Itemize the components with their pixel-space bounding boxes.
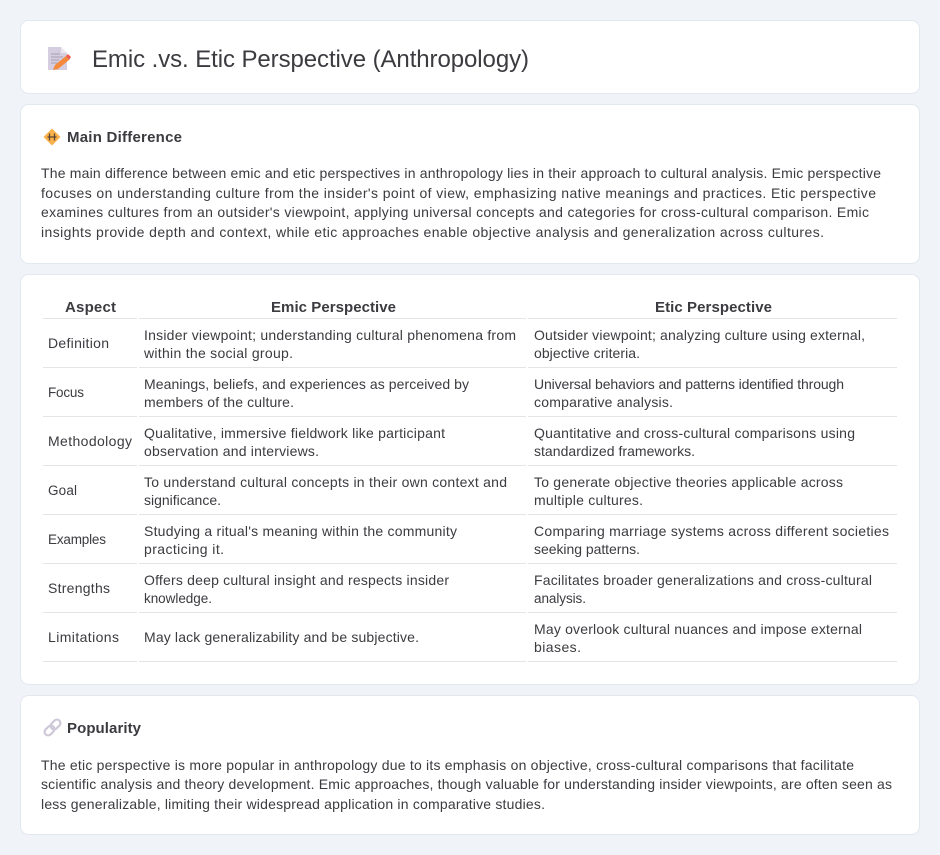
row: definition: Definition <box>48 335 109 351</box>
row: focus: Meanings, beliefs, and experiences as perceived by <box>144 376 469 392</box>
row: limitations <box>48 621 862 655</box>
row: goal: significance. <box>144 492 221 508</box>
row: methodology: Methodology <box>48 433 132 449</box>
text block: main difference paragraph: examines cultures from an outsider's viewpoint, applying universal concepts and categories for cross-cultural comparison. Emic <box>41 204 869 220</box>
row: examples: Comparing marriage systems across different societies <box>534 523 889 539</box>
title: Emic .vs. Etic Perspective (Anthropology) <box>92 46 529 73</box>
row: strengths: Offers deep cultural insight and respects insider <box>144 572 449 588</box>
row: focus <box>48 376 844 410</box>
row: focus: Universal behaviors and patterns identified through <box>534 376 844 392</box>
text block: popularity paragraph <box>41 757 892 812</box>
panel: popularity <box>20 696 920 834</box>
icon: chain link <box>43 718 62 737</box>
table header: Etic Perspective <box>655 299 772 316</box>
row: definition <box>48 327 865 361</box>
row: examples: Studying a ritual's meaning within the community <box>144 523 457 539</box>
heading: popularity: Popularity <box>67 720 142 737</box>
panel: title header <box>20 20 920 94</box>
row: strengths: analysis. <box>534 591 586 606</box>
text block: popularity paragraph: scientific analysis and theory development. Emic approaches, though valuable for understanding insider viewpoints, are often seen as <box>41 776 892 792</box>
row: definition: Outsider viewpoint; analyzing culture using external, <box>534 327 865 343</box>
row: goal: Goal <box>48 483 77 498</box>
panel: main difference <box>20 104 920 264</box>
panel: comparison table <box>20 274 920 684</box>
heading: main difference: Main Difference <box>67 129 182 146</box>
row: limitations: May lack generalizability and be subjective. <box>144 629 419 645</box>
row: limitations: May overlook cultural nuances and impose external <box>534 621 862 637</box>
table header <box>65 299 772 316</box>
text block: main difference paragraph: insights provide depth and context, while etic approaches enable objective analysis and generalization across cultures. <box>41 224 824 240</box>
row: limitations: biases. <box>534 639 581 655</box>
row: definition: within the social group. <box>143 345 293 361</box>
row: definition: Insider viewpoint; understanding cultural phenomena from <box>144 327 516 343</box>
icon: diamond road sign <box>44 128 60 146</box>
text block: popularity paragraph: less generalizable, limiting their widespread application in comparative studies. <box>41 796 545 812</box>
row: goal: multiple cultures. <box>534 492 643 508</box>
row: methodology: Quantitative and cross-cultural comparisons using <box>534 425 855 441</box>
table header: Aspect <box>65 299 116 316</box>
row: examples: Examples <box>48 532 106 547</box>
row: examples: seeking patterns. <box>534 541 640 557</box>
row: definition: objective criteria. <box>534 345 640 361</box>
text block: popularity paragraph: The etic perspective is more popular in anthropology due to its emphasis on objective, cross-cultural comparisons that facilitate <box>41 757 854 773</box>
text block: main difference paragraph <box>41 165 881 240</box>
text block: main difference paragraph: focuses on understanding culture from the insider's point of view, emphasizing native meanings and practices. Etic perspective <box>41 185 876 201</box>
row: limitations: Limitations <box>48 629 119 645</box>
text block: main difference paragraph: The main difference between emic and etic perspectives in anthropology lies in their approach to cultural analysis. Emic perspective <box>41 165 881 181</box>
row: goal: To understand cultural concepts in their own context and <box>144 474 507 490</box>
row: examples <box>48 523 889 557</box>
row: focus: members of the culture. <box>144 394 294 410</box>
icon: document with pencil <box>48 47 71 70</box>
row: strengths: Strengths <box>48 580 110 596</box>
row: methodology <box>48 425 855 459</box>
row: strengths <box>48 572 872 606</box>
row: goal: To generate objective theories applicable across <box>534 474 843 490</box>
row: strengths: knowledge. <box>144 591 212 606</box>
row: examples: practicing it. <box>144 541 224 557</box>
row: goal <box>48 474 843 508</box>
row: methodology: standardized frameworks. <box>534 443 695 459</box>
row: focus: Focus <box>48 385 84 400</box>
row: focus: comparative analysis. <box>534 394 673 410</box>
table header: Emic Perspective <box>271 299 396 316</box>
row: strengths: Facilitates broader generalizations and cross-cultural <box>534 572 872 588</box>
row: methodology: observation and interviews. <box>144 443 319 459</box>
row: methodology: Qualitative, immersive fieldwork like participant <box>144 425 445 441</box>
